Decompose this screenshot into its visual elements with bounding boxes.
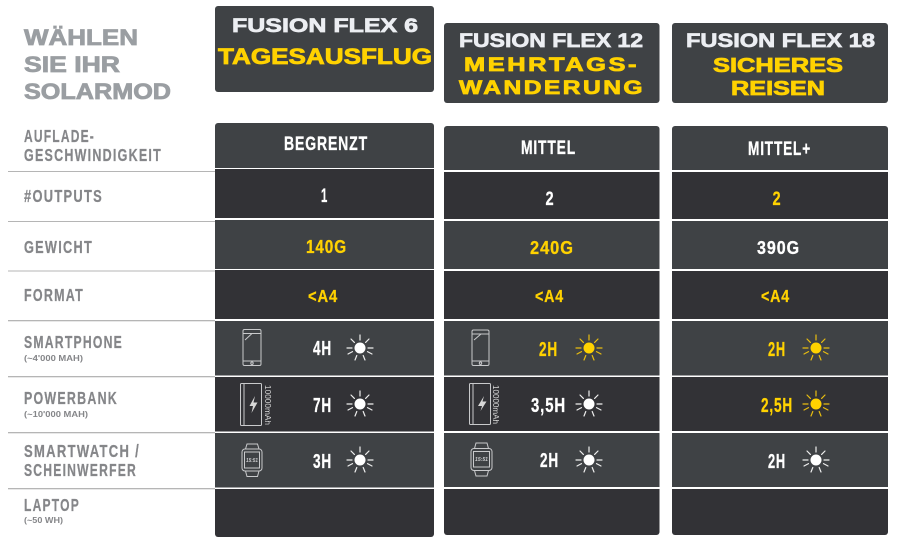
column: Fusion Flex 6: 7H <box>313 395 332 417</box>
row labels: #OUTPUTS <box>24 186 103 206</box>
column: Fusion Flex 12: 2 <box>546 189 554 210</box>
icon: smartphone <box>472 330 489 366</box>
column: Fusion Flex 18: 2H <box>768 451 786 473</box>
title: SIE IHR <box>24 52 120 77</box>
icon: smartwatch <box>242 444 262 476</box>
title: SOLARMOD <box>24 79 171 104</box>
column: Fusion Flex 12: <A4 <box>535 286 564 306</box>
title: WÄHLEN <box>24 25 138 50</box>
column: Fusion Flex 6: <A4 <box>308 286 338 306</box>
column: Fusion Flex 12: 2H <box>539 339 558 361</box>
icon: smartwatch: 15:51 <box>475 457 488 463</box>
column: Fusion Flex 6: 3H <box>313 451 332 473</box>
icon: powerbank: 10000mAh <box>491 385 500 424</box>
column: Fusion Flex 18: 2 <box>772 189 782 210</box>
icon: sun <box>803 447 829 472</box>
icon: smartwatch: 15:51 <box>246 458 258 464</box>
row labels: (~4'000 MAH) <box>24 353 83 363</box>
header: Fusion Flex 18: FUSION FLEX 18 <box>686 30 875 52</box>
column: Fusion Flex 18: 390G <box>757 237 800 258</box>
row labels: LAPTOP <box>24 495 80 515</box>
icon: sun <box>576 335 602 360</box>
row labels: SMARTWATCH / <box>24 441 140 461</box>
row labels: GEWICHT <box>24 237 93 257</box>
row labels: POWERBANK <box>24 388 118 408</box>
column: Fusion Flex 12: 3,5H <box>531 395 566 417</box>
column: Fusion Flex 18: <A4 <box>761 286 790 306</box>
column: Fusion Flex 18 <box>672 126 888 535</box>
header: Fusion Flex 12 <box>444 23 660 103</box>
header: Fusion Flex 6 <box>215 6 434 92</box>
row labels: AUFLADE- <box>24 126 95 146</box>
column: Fusion Flex 6: BEGRENZT <box>284 134 368 155</box>
icon: sun <box>347 335 373 360</box>
column: Fusion Flex 18: MITTEL+ <box>748 139 811 160</box>
column: Fusion Flex 12: 240G <box>530 237 574 258</box>
column: Fusion Flex 18: 2,5H <box>761 395 793 417</box>
column: Fusion Flex 6: 4H <box>313 338 332 360</box>
column: Fusion Flex 6 <box>215 123 434 537</box>
row labels: SMARTPHONE <box>24 332 123 352</box>
row labels: SCHEINWERFER <box>24 460 137 480</box>
header: Fusion Flex 12: FUSION FLEX 12 <box>459 30 643 52</box>
header: Fusion Flex 18: SICHERES <box>713 54 843 77</box>
header: Fusion Flex 18 <box>672 23 888 103</box>
header: Fusion Flex 6: FUSION FLEX 6 <box>232 15 418 37</box>
icon: sun <box>803 335 829 360</box>
column: Fusion Flex 12: MITTEL <box>521 138 576 159</box>
header: Fusion Flex 12: MEHRTAGS- <box>464 54 639 76</box>
icon: powerbank <box>470 384 500 424</box>
column: Fusion Flex 6: 140G <box>306 236 347 257</box>
row labels: GESCHWINDIGKEIT <box>24 145 162 165</box>
icon: sun <box>803 391 829 416</box>
row labels: (~50 WH) <box>24 515 63 525</box>
row labels: (~10'000 MAH) <box>24 409 88 419</box>
column: Fusion Flex 6: 1 <box>321 186 328 207</box>
icon: sun <box>576 447 602 472</box>
icon: smartphone <box>243 330 261 366</box>
title <box>24 25 171 104</box>
column: Fusion Flex 18: 2H <box>768 339 786 361</box>
row labels <box>8 126 215 525</box>
icon: powerbank <box>240 384 272 426</box>
column: Fusion Flex 12 <box>444 126 660 535</box>
icon: sun <box>576 391 602 416</box>
icon: sun <box>347 391 373 416</box>
header: Fusion Flex 6: TAGESAUSFLUG <box>218 44 432 69</box>
icon: powerbank: 10000mAh <box>263 385 272 425</box>
column: Fusion Flex 12: 2H <box>540 450 559 472</box>
row labels: FORMAT <box>24 285 84 305</box>
header: Fusion Flex 18: REISEN <box>731 77 825 100</box>
icon: sun <box>347 447 373 472</box>
icon: smartwatch <box>471 443 492 476</box>
header: Fusion Flex 12: WANDERUNG <box>459 77 645 99</box>
